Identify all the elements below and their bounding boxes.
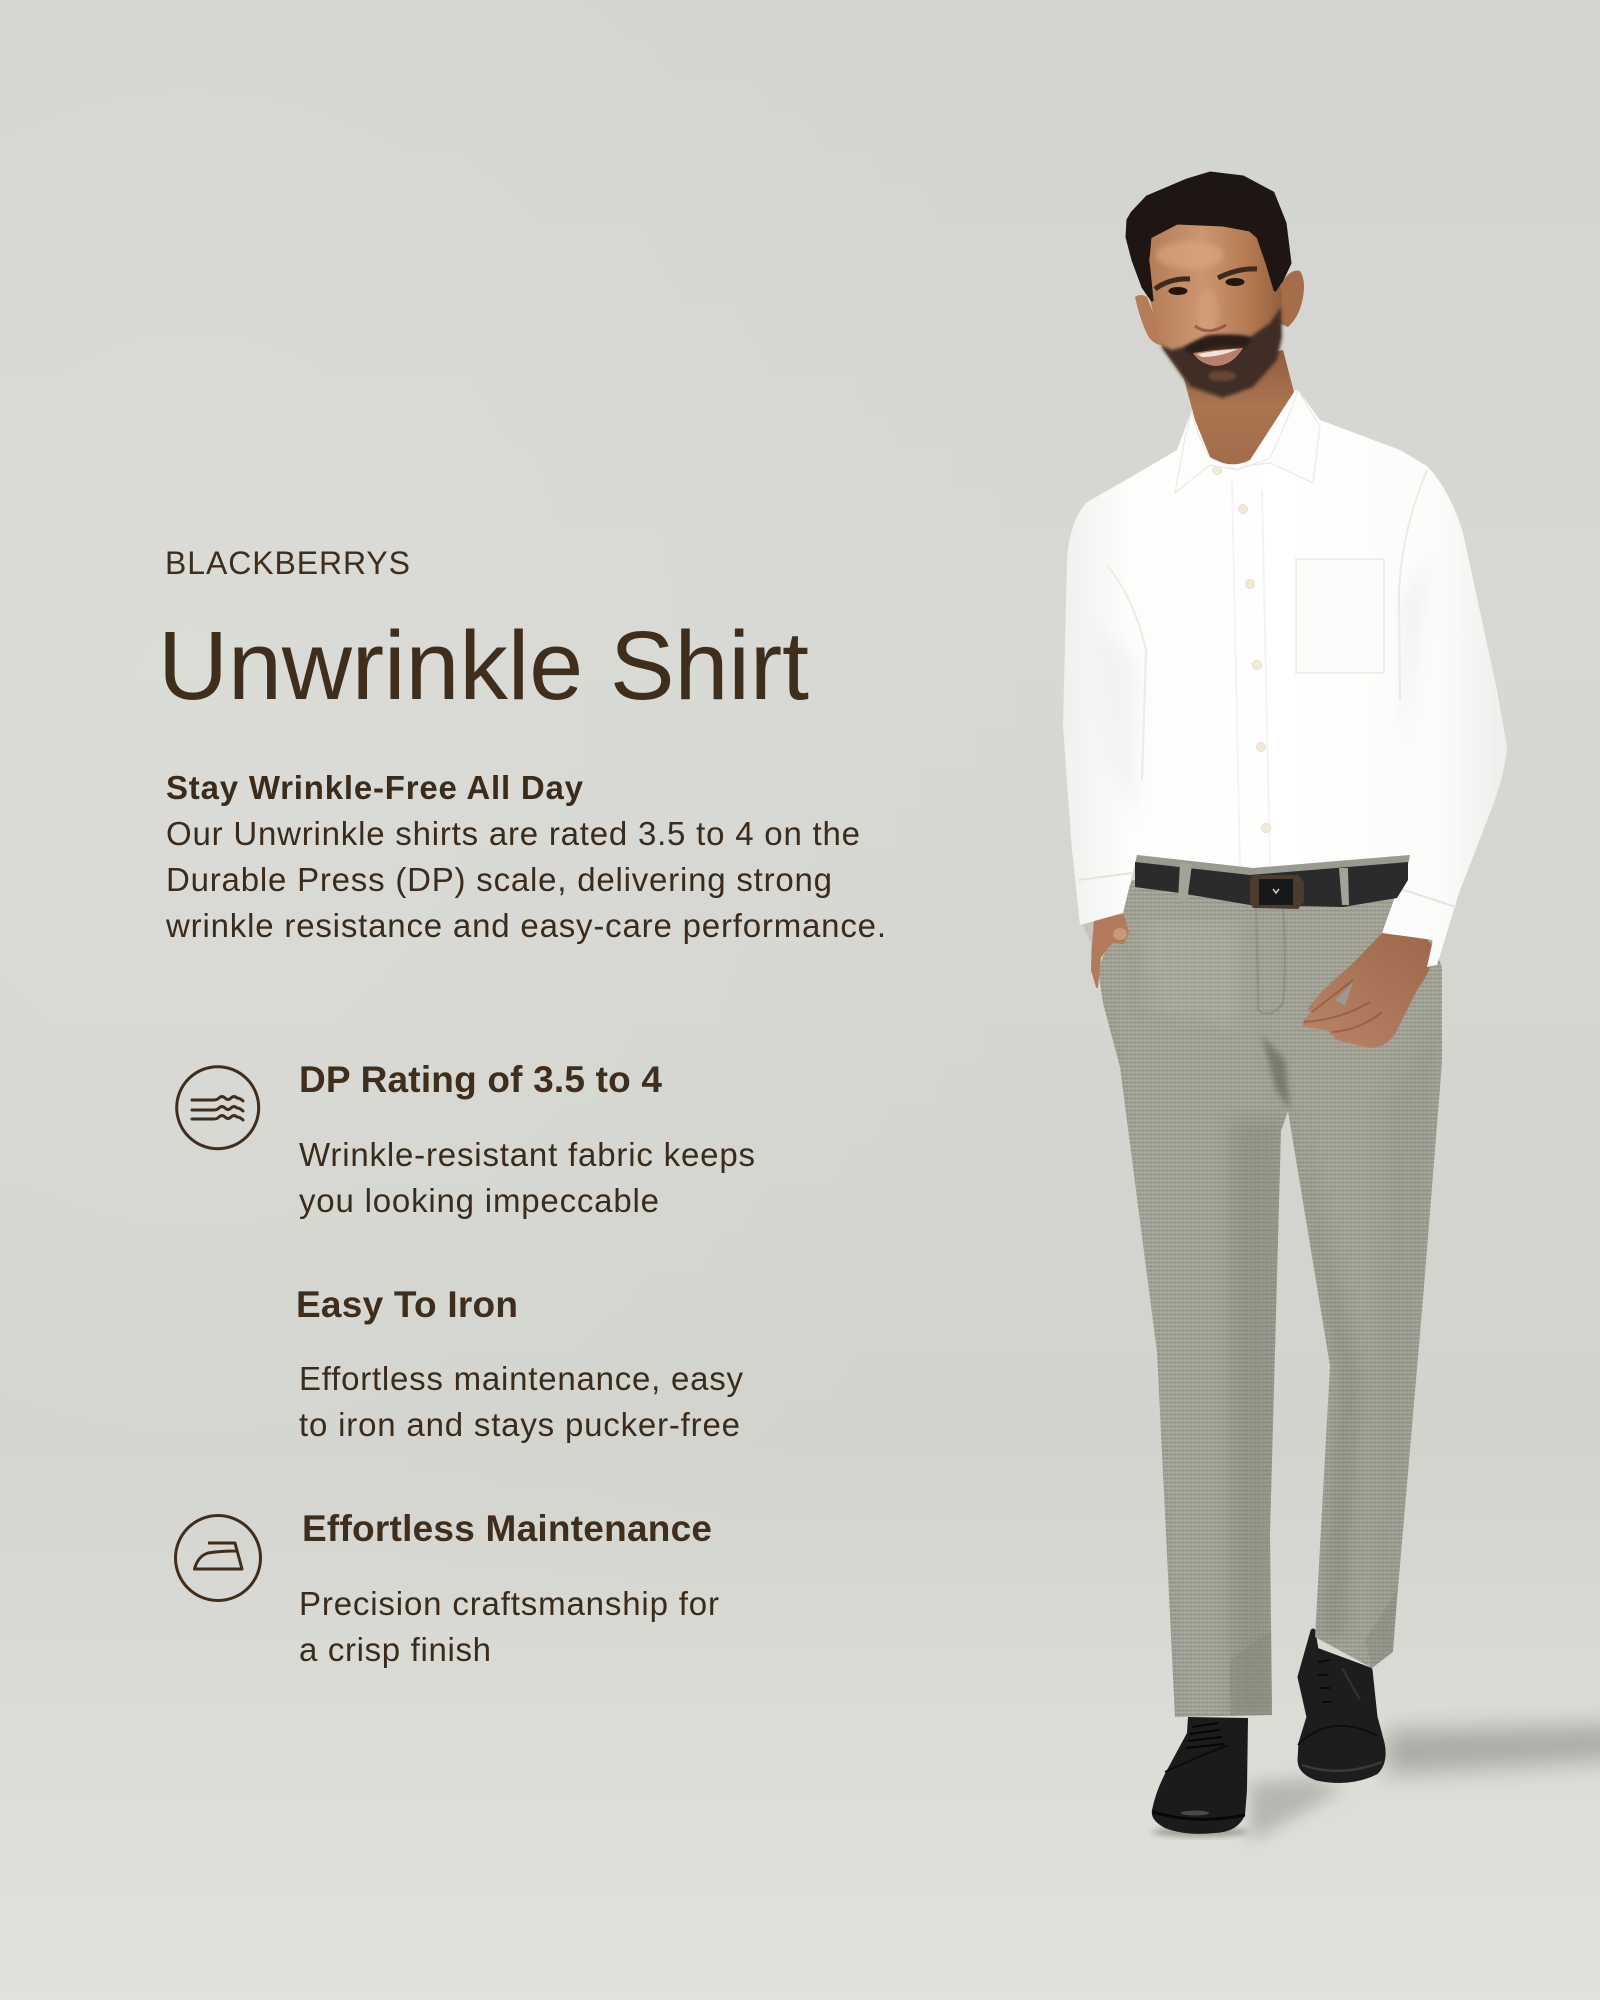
feature: DP rating: DP Rating of 3.5 to 4 [299, 1059, 662, 1100]
belt buckle [1250, 875, 1304, 909]
waistband [1135, 855, 1410, 878]
feature: easy to iron: Effortless maintenance, easy [299, 1360, 744, 1397]
back shoe [1298, 1631, 1383, 1780]
mouth [1193, 348, 1243, 366]
neck [1183, 350, 1294, 464]
intro text block: Stay Wrinkle-Free All Day [166, 769, 584, 806]
feature: effortless maintenance: Effortless Maintenance [302, 1508, 712, 1549]
brand name: BLACKBERRYS [165, 545, 410, 581]
front shoe [1152, 1717, 1248, 1834]
crotch fold [1262, 1035, 1290, 1110]
pocket [1296, 559, 1384, 673]
hair [1127, 173, 1290, 300]
feature: effortless maintenance: a crisp finish [299, 1631, 491, 1668]
icon: iron [176, 1516, 260, 1600]
hem fold [1230, 1630, 1272, 1717]
intro text block [165, 769, 886, 944]
nose [1195, 325, 1226, 331]
icon: wrinkle-free waves [177, 1067, 259, 1149]
shirt sleeve seams [1107, 470, 1427, 780]
feature: easy to iron: to iron and stays pucker-free [299, 1406, 740, 1443]
placket [1232, 480, 1270, 866]
feature: DP rating: Wrinkle-resistant fabric keeps [299, 1136, 755, 1173]
intro text block: Our Unwrinkle shirts are rated 3.5 to 4 on the [166, 815, 860, 852]
cuffs [1078, 873, 1456, 907]
feature: easy to iron [296, 1284, 744, 1443]
buttons [1212, 466, 1270, 832]
feature: effortless maintenance: Precision craftsmanship for [299, 1585, 719, 1622]
mustache [1184, 335, 1252, 355]
eyes and brows [1155, 269, 1257, 289]
ears [1135, 295, 1162, 345]
feature: DP rating: you looking impeccable [299, 1182, 659, 1219]
face [1150, 215, 1282, 398]
collar [1175, 390, 1320, 493]
feature: easy to iron: Easy To Iron [296, 1284, 518, 1325]
model figure [1063, 173, 1507, 1834]
trousers [1090, 880, 1442, 1717]
shirt [1063, 390, 1507, 967]
floor shadow [1152, 1722, 1600, 1842]
head [1127, 173, 1304, 398]
intro text block: wrinkle resistance and easy-care performance. [165, 907, 886, 944]
right hand [1302, 933, 1435, 1048]
chin patch [1208, 371, 1236, 381]
intro text block: Durable Press (DP) scale, delivering strong [166, 861, 832, 898]
beard [1160, 307, 1282, 398]
title: Unwrinkle Shirt [158, 611, 809, 720]
forehead highlight [1156, 241, 1224, 269]
left hand in pocket [1083, 915, 1128, 987]
feature: DP rating [299, 1059, 755, 1219]
fly [1256, 908, 1285, 1014]
belt [1135, 862, 1408, 907]
feature: effortless maintenance [299, 1508, 719, 1668]
